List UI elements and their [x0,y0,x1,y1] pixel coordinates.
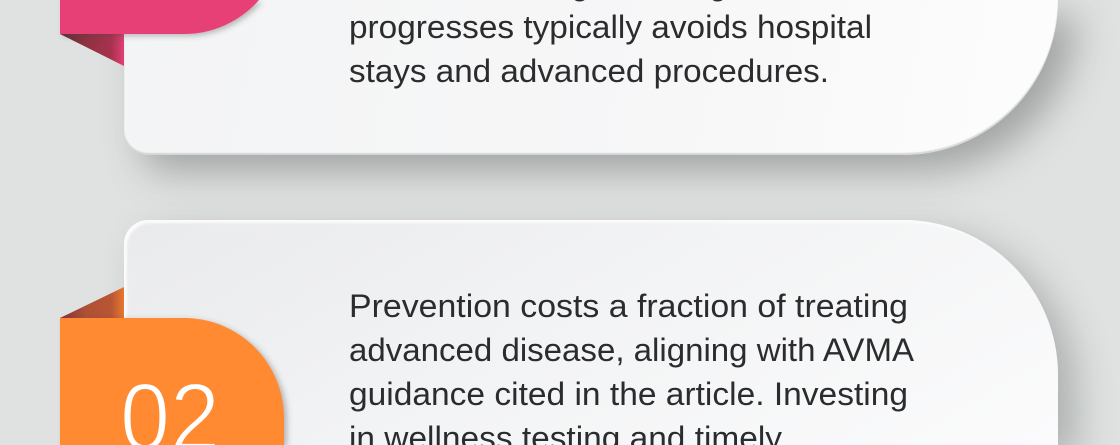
panel: card 02 [124,220,1058,445]
text block: card 02 body: guidance cited in the article. Investing [349,376,908,412]
icon: pink ribbon fold [60,34,124,66]
text block: card 02 body: advanced disease, aligning with AVMA [349,332,915,368]
number tab 01 [60,0,259,34]
text block: card 02 body [349,288,915,445]
text block: card 01 body [349,0,872,89]
text block: card 01 body: progresses typically avoids hospital [349,9,872,45]
panel: card 01 [124,0,1058,155]
icon: orange ribbon fold [60,287,124,318]
number tab 02 [60,318,284,445]
text block: card 02 body: Prevention costs a fraction of treating [349,288,908,324]
text block: card 01 body: stays and advanced procedures. [349,53,829,89]
